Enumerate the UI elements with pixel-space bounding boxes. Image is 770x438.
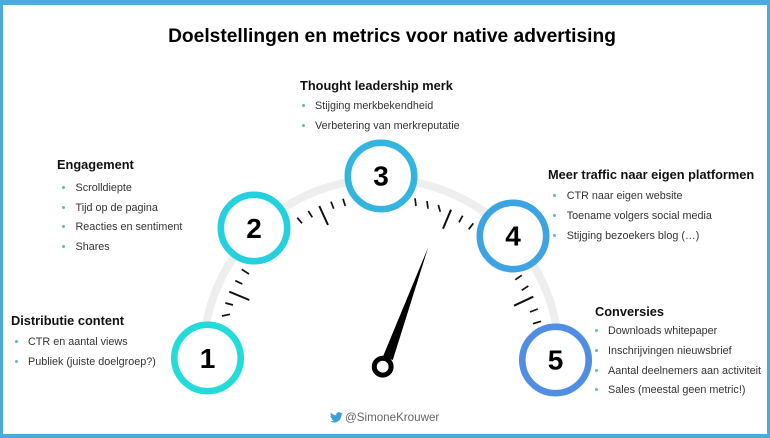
text block: Meer traffic naar eigen platformen <box>548 167 754 242</box>
text: CTR en aantal views <box>28 336 128 348</box>
text: Scrolldiepte <box>76 182 132 194</box>
circle 5 <box>522 327 589 393</box>
text: Stijging bezoekers blog (…) <box>567 230 699 242</box>
text: Stijging merkbekendheid <box>315 100 433 112</box>
text: Downloads whitepaper <box>608 325 717 337</box>
text block: Thought leadership merk <box>300 78 460 132</box>
text: Shares <box>76 241 110 253</box>
text: Engagement <box>57 157 134 172</box>
circle 2: 2 <box>246 213 262 244</box>
text: Meer traffic naar eigen platformen <box>548 167 754 182</box>
text: Tijd op de pagina <box>76 202 158 214</box>
text: Toename volgers social media <box>567 210 712 222</box>
circle 1: 1 <box>200 343 215 374</box>
needle <box>374 247 428 375</box>
text: CTR naar eigen website <box>567 190 683 202</box>
text: Thought leadership merk <box>300 78 453 93</box>
text: Conversies <box>595 304 664 319</box>
text block: Distributie content <box>11 313 156 368</box>
circle 5: 5 <box>548 344 563 376</box>
text block: Conversies <box>595 304 761 396</box>
circle 2 <box>221 195 287 261</box>
circle 4: 4 <box>505 220 521 252</box>
circle 3 <box>348 143 414 209</box>
twitter handle: @SimoneKrouwer <box>345 411 439 424</box>
text: Inschrijvingen nieuwsbrief <box>608 345 732 357</box>
text block: Engagement <box>57 157 182 253</box>
circle 4 <box>480 203 546 269</box>
gauge arc <box>203 179 559 357</box>
title: Doelstellingen en metrics voor native advertising <box>168 26 616 47</box>
text: Publiek (juiste doelgroep?) <box>28 356 156 368</box>
text: Verbetering van merkreputatie <box>315 120 460 132</box>
circle 1 <box>174 325 241 391</box>
text: Distributie content <box>11 313 124 328</box>
text: Sales (meestal geen metric!) <box>608 384 745 396</box>
circle 3: 3 <box>373 160 389 192</box>
text: Aantal deelnemers aan activiteit <box>608 365 761 377</box>
icon: twitter bird <box>330 412 343 423</box>
text: Reacties en sentiment <box>76 221 182 233</box>
tick marks <box>222 198 541 324</box>
